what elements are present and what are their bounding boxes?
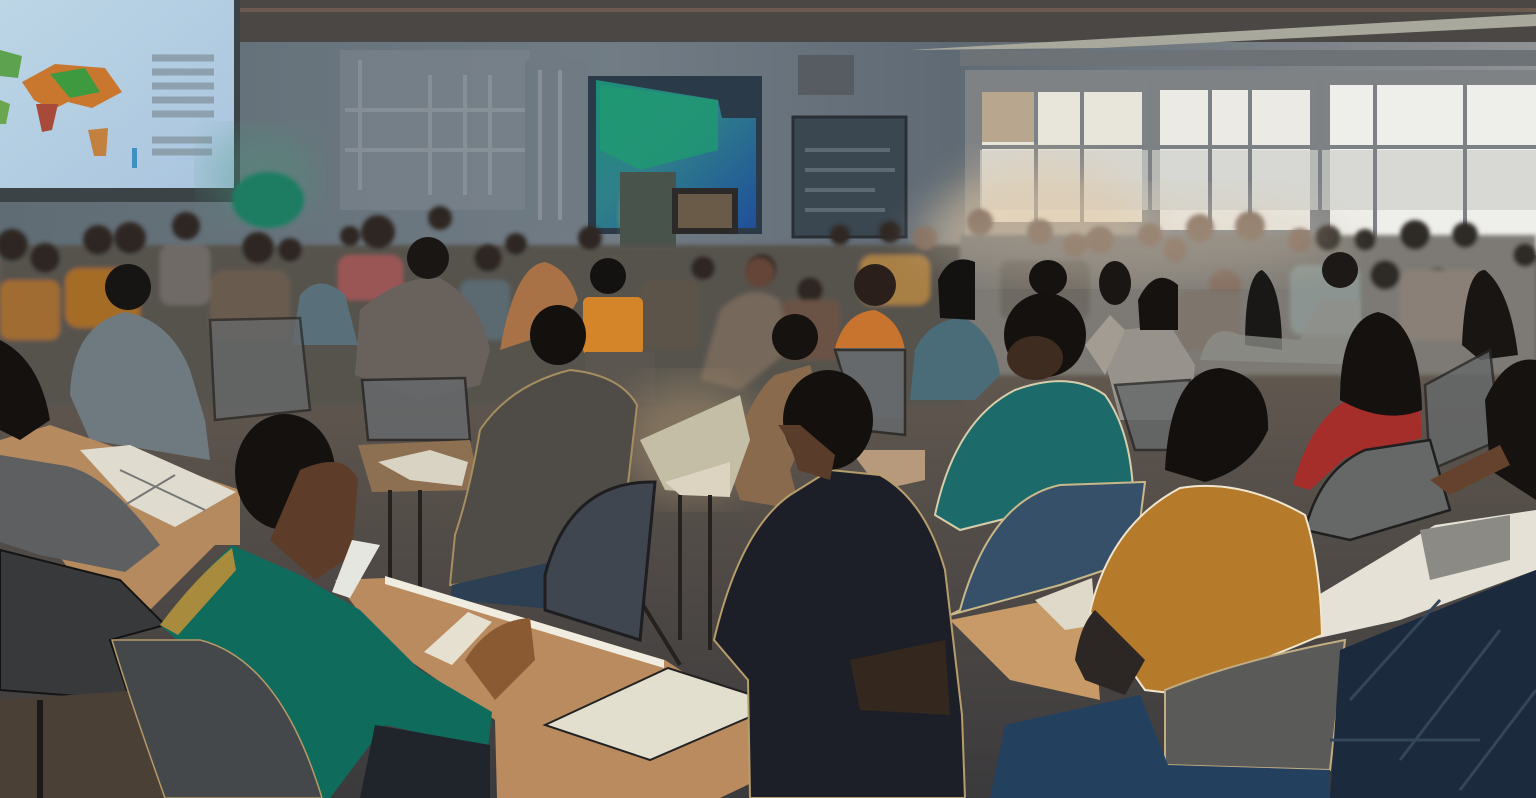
chalkboard [793,117,906,237]
floor lower left [0,690,165,798]
papers [80,445,236,527]
middle row people [70,237,1518,460]
glow by windows [930,160,1150,320]
person: orange shirt mid [835,264,905,418]
wall notice boards [340,50,590,230]
back wall [0,0,1536,300]
desk: right tan section [950,600,1100,700]
chair: dark foreground left [112,640,322,798]
desk: right white section [1310,510,1536,640]
person: orange vest [500,258,655,402]
map [0,50,122,156]
chair: front of main desk [360,725,490,798]
person: left grey foreground [0,340,160,572]
chair: blue behind teal [950,482,1145,615]
person: dark hair right [1245,270,1282,350]
person: long hair [1029,260,1195,420]
chair legs mid floor [390,490,710,665]
ceiling [230,0,1536,66]
chair: blue-grey beside jacket [545,482,655,640]
desk: left rear [0,425,240,610]
wall speaker box [798,55,854,95]
centre floor glow [620,380,760,500]
person: back right hair [1462,270,1518,360]
person: man beside chair centre [730,314,820,510]
person: grey jacket [450,305,637,610]
main desk [335,576,810,798]
person: teal-grey [292,284,358,345]
person: grey shirt left [70,264,210,460]
person: green shirt [160,414,535,798]
floor [0,260,1536,798]
chair: grey right [1305,440,1450,540]
papers right [1035,578,1096,630]
person: blue-grey right of centre [910,259,1000,400]
lectern monitor [672,188,738,234]
person: teal shirt [935,293,1133,530]
floor dark blue lower right [1330,570,1536,798]
person: red shirt [1293,312,1422,490]
small paper [424,612,492,665]
chair: front orange shirt [990,640,1345,798]
paper [545,668,752,760]
person: far right edge [1430,360,1536,500]
windows [965,70,1536,260]
small desks mid [358,395,925,497]
person: back row grey bodies right [1200,300,1365,365]
person: brown jacket [355,237,490,400]
person: hazy centre [700,257,790,390]
chairs mid row [210,318,1500,470]
projection screen with world map [0,0,240,202]
green wall glow [205,130,315,228]
centre display screen [588,76,762,250]
desk: right far shade [1420,515,1510,580]
chair: dark lower left [0,550,165,700]
back crowd [0,206,1536,405]
person: orange shirt [1075,368,1322,695]
person: dark navy shirt [714,370,965,798]
person: seated haired centre-right [1322,252,1358,288]
light haze [910,190,1350,280]
